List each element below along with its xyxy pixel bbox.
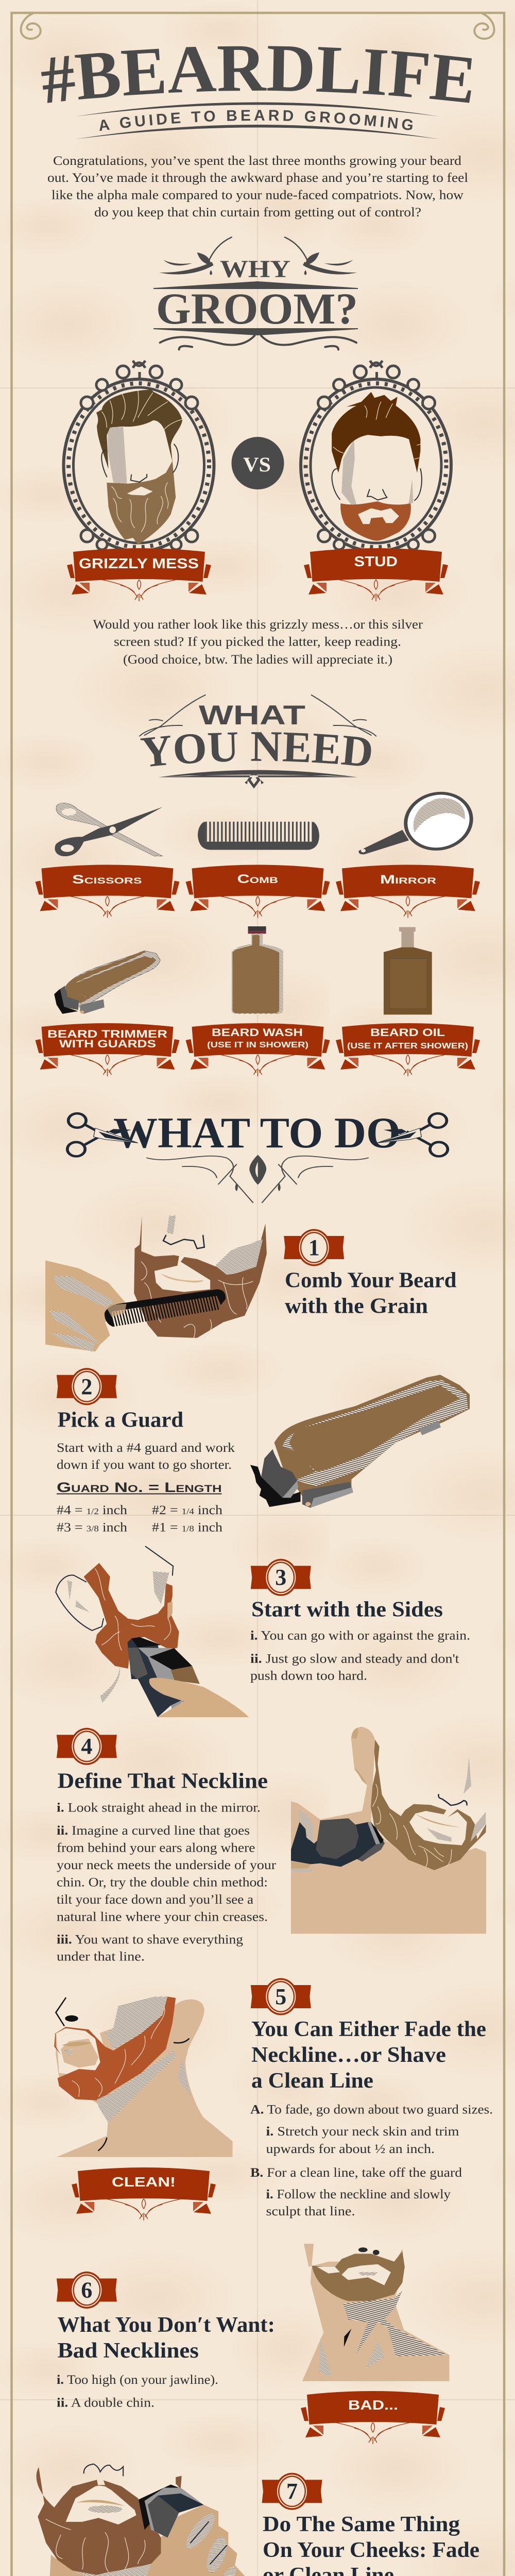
body 3: push down too hard.	[250, 1669, 367, 1683]
heading 5: You Can Either Fade the	[251, 2018, 486, 2041]
step 7	[37, 2464, 479, 2576]
step 5	[54, 1978, 493, 2221]
ribbon: mirror	[336, 865, 480, 918]
body 4: chin. Or, try the double chin method:	[57, 1875, 268, 1890]
ribbon: beard oil	[336, 1023, 480, 1076]
step 3	[56, 1547, 470, 1717]
step 6	[57, 2244, 450, 2444]
vs badge	[232, 437, 284, 489]
illustration: cheeks	[37, 2464, 247, 2576]
body 3: i. You can go with or against the grain.	[250, 1629, 470, 1642]
mirror frame left	[64, 361, 214, 551]
badge 3	[251, 1559, 311, 1596]
guard table: #2 = 1/4 inch	[152, 1503, 223, 1517]
body 5: i. Follow the neckline and slowly	[266, 2188, 451, 2201]
tools panel	[35, 785, 483, 1076]
title: #BEARDLIFE	[41, 46, 472, 103]
badge 5: 5	[275, 1984, 286, 2009]
ribbon: beard wash: (USE IT IN SHOWER)	[207, 1041, 308, 1049]
badge 4: 4	[81, 1734, 92, 1759]
tool: beard oil	[384, 927, 432, 1014]
ribbon: beard oil: BEARD OIL	[370, 1027, 445, 1039]
ribbon: comb	[185, 865, 330, 918]
ribbon: scissors: Scissors	[72, 873, 142, 887]
guard table	[57, 1480, 223, 1534]
scissors left	[67, 1113, 138, 1156]
body 6: ii. A double chin.	[57, 2396, 154, 2410]
tool: beard wash	[232, 926, 283, 1014]
body 5: sculpt that line.	[266, 2205, 355, 2218]
tool: mirror	[358, 785, 483, 858]
heading 1	[285, 1268, 456, 1318]
ribbon: scissors	[35, 865, 179, 918]
question text: Would you rather look like this grizzly mess…or this silver	[93, 618, 423, 632]
question text	[93, 618, 423, 667]
guard table: #4 = 1/2 inch	[57, 1503, 128, 1517]
ribbon: stud	[304, 548, 448, 601]
scissors right	[377, 1113, 448, 1156]
badge 1: 1	[308, 1235, 320, 1260]
ribbon: beard trimmer: WITH GUARDS	[59, 1038, 156, 1050]
comparison: grizzly mess portrait	[64, 361, 214, 601]
ribbon: beard trimmer	[35, 1023, 179, 1076]
badge 4	[57, 1728, 117, 1765]
ribbon: beard trimmer: BEARD TRIMMER	[47, 1028, 167, 1040]
illustration: sides	[56, 1547, 249, 1717]
guard table: #3 = 3/8 inch	[57, 1521, 128, 1534]
question text: (Good choice, btw. The ladies will appreciate it.)	[123, 653, 392, 667]
step 1	[45, 1216, 456, 1351]
badge 6	[57, 2272, 117, 2309]
illustration: neckline	[291, 1727, 486, 1934]
ribbon: stud: STUD	[354, 553, 398, 569]
ribbon: clean: CLEAN!	[112, 2174, 176, 2190]
badge 7: 7	[286, 2479, 298, 2504]
heading 5	[251, 2018, 486, 2093]
tool: comb	[198, 822, 319, 850]
body 5	[250, 2103, 493, 2218]
mirror frame right	[301, 361, 451, 551]
body 5: B. For a clean line, take off the guard	[250, 2166, 462, 2180]
ribbon: clean	[72, 2167, 216, 2221]
comparison: stud portrait	[301, 361, 451, 601]
heading: what you need: YOU NEED	[140, 732, 371, 767]
heading 6	[58, 2313, 275, 2363]
heading: what to do: WHAT TO DO	[113, 1109, 401, 1157]
badge 1	[284, 1229, 344, 1266]
heading 5: a Clean Line	[251, 2069, 373, 2093]
badge 5	[251, 1978, 311, 2015]
intro text: do you keep that chin curtain from getting out of control?	[94, 206, 421, 219]
ribbon: beard wash	[185, 1023, 330, 1076]
body 4: natural line where your chin creases.	[57, 1910, 268, 1924]
body 6	[57, 2373, 218, 2410]
heading: why groom: WHY	[220, 256, 290, 283]
body 6: i. Too high (on your jawline).	[57, 2373, 218, 2387]
badge 2	[57, 1368, 117, 1405]
body 4	[57, 1801, 277, 1964]
heading 7: On Your Cheeks: Fade	[263, 2538, 479, 2562]
ribbon: beard wash: BEARD WASH	[212, 1027, 303, 1039]
ribbon: bad	[301, 2391, 445, 2444]
illustration: combing	[45, 1216, 267, 1351]
body 3: ii. Just go slow and steady and don't	[250, 1652, 459, 1666]
intro text	[47, 154, 468, 219]
ribbon: beard oil: (USE IT AFTER SHOWER)	[347, 1042, 468, 1050]
heading: what to do	[67, 1109, 448, 1202]
intro text: Congratulations, you’ve spent the last three months growing your beard	[53, 154, 462, 168]
body 2: down if you want to go shorter.	[57, 1458, 232, 1472]
step 4	[57, 1727, 486, 1964]
heading 7	[263, 2513, 479, 2576]
body 4: tilt your face down and you’ll see a	[57, 1893, 253, 1907]
intro text: like the alpha male compared to your nude-faced compatriots. Now, how	[52, 189, 464, 202]
body 3	[250, 1629, 470, 1683]
badge 2: 2	[81, 1374, 92, 1399]
heading: what you need	[139, 694, 377, 788]
body 2: Start with a #4 guard and work	[57, 1441, 235, 1455]
badge 7	[262, 2473, 322, 2510]
heading 6: What You Don′t Want:	[58, 2313, 275, 2337]
illustration: bad neckline	[302, 2244, 450, 2381]
heading 5: Neckline…or Shave	[251, 2043, 446, 2067]
question text: screen stud? If you picked the latter, keep reading.	[114, 635, 401, 649]
ribbon: bad: BAD...	[348, 2397, 398, 2413]
body 4: from behind your ears along where	[57, 1841, 255, 1855]
badge 3: 3	[275, 1565, 286, 1590]
illustration: clean neckline	[54, 1997, 233, 2157]
guard table: Guard No. = Length	[57, 1480, 221, 1495]
body 5: i. Stretch your neck skin and trim	[266, 2125, 459, 2139]
body 2	[57, 1441, 235, 1472]
body 4: your neck meets the underside of your	[57, 1858, 277, 1872]
body 4: iii. You want to shave everything	[57, 1933, 244, 1946]
tool: scissors	[55, 803, 163, 856]
badge 6: 6	[81, 2277, 92, 2303]
heading: why groom	[153, 237, 358, 349]
subtitle: A GUIDE TO BEARD GROOMING	[99, 110, 413, 131]
body 4: under that line.	[57, 1950, 145, 1964]
heading 6: Bad Necklines	[58, 2339, 199, 2363]
guard table: #1 = 1/8 inch	[152, 1521, 223, 1534]
step 2	[57, 1368, 470, 1534]
heading 4: Define That Neckline	[58, 1769, 268, 1793]
subtitle	[76, 102, 439, 139]
heading 2: Pick a Guard	[58, 1409, 183, 1432]
vs badge: VS	[243, 453, 271, 476]
ribbon: grizzly mess	[67, 548, 211, 601]
illustration: trimmer	[250, 1375, 470, 1508]
heading: why groom: GROOM?	[156, 284, 358, 333]
body 5: A. To fade, go down about two guard sizes.	[250, 2103, 493, 2116]
heading 7: Do The Same Thing	[263, 2513, 460, 2536]
body 5: upwards for about ½ an inch.	[266, 2142, 435, 2156]
body 4: ii. Imagine a curved line that goes	[57, 1824, 250, 1838]
tool: trimmer	[54, 951, 160, 1014]
heading: what you need: WHAT	[199, 700, 305, 731]
heading 1: with the Grain	[285, 1294, 428, 1318]
intro text: out. You’ve made it through the awkward phase and you’re starting to feel	[47, 171, 468, 185]
heading 1: Comb Your Beard	[285, 1268, 456, 1292]
ribbon: grizzly mess: GRIZZLY MESS	[79, 555, 199, 571]
heading 3: Start with the Sides	[251, 1598, 443, 1622]
ribbon: comb: Comb	[237, 872, 278, 886]
body 4: i. Look straight ahead in the mirror.	[57, 1801, 261, 1815]
ribbon: mirror: Mirror	[380, 873, 436, 887]
